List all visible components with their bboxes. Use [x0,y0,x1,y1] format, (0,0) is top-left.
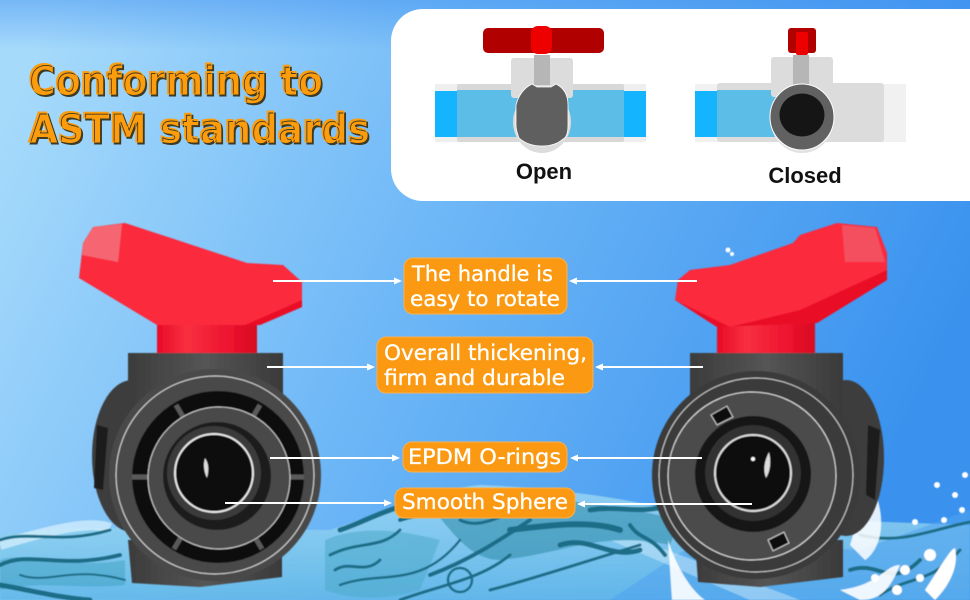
panel: open and closed diagrams [391,9,970,201]
title: Conforming to [28,56,322,104]
water splash [0,248,970,600]
front flange [109,369,321,581]
callout: smooth sphere: Smooth Sphere [402,490,568,514]
red handle [79,223,302,353]
label: closed: Closed [768,163,842,188]
arrow: handle left [273,278,402,284]
arrow: sphere right [577,500,752,508]
callout arrows [225,278,752,508]
callout: handle: The handle is [411,262,553,286]
label: open: Open [516,159,572,184]
arrow: o-rings left [270,454,400,462]
arrow: body right [595,364,703,370]
valve body [128,353,283,587]
diagram: closed valve [695,28,906,153]
callout: thickening: Overall thickening, [384,341,587,365]
arrow: sphere left [225,500,392,506]
left valve [79,223,321,587]
callout: o-rings: EPDM O-rings [408,445,561,469]
arrow: o-rings right [570,454,702,462]
valve body [690,353,843,587]
arrow: handle right [569,278,697,284]
callout: thickening: firm and durable [384,366,565,390]
right valve [652,223,887,587]
callout: thickening [377,337,593,393]
back flange [808,380,884,536]
callout: handle [404,258,567,314]
callout: handle: easy to rotate [410,287,560,311]
diagram: open valve [435,26,646,153]
front flange [652,371,860,579]
title: ASTM standards [28,104,369,152]
arrow: body left [267,364,375,370]
back flange [92,380,172,532]
red handle [675,223,887,353]
title [28,56,369,152]
